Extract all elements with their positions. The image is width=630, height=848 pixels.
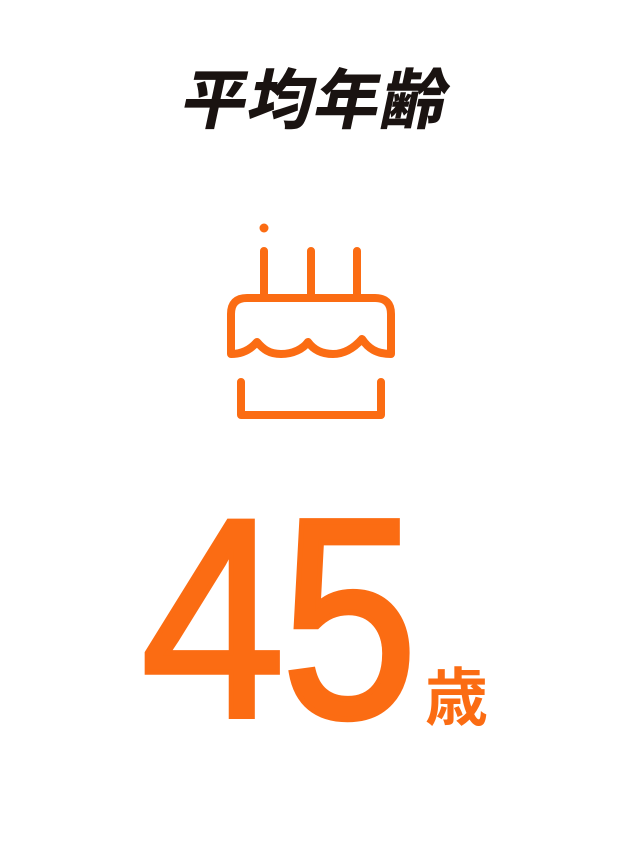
digit 4: 4 (141, 460, 285, 777)
big number (141, 460, 417, 778)
title: 平均年齢 (175, 48, 460, 142)
digit 5: 5 (282, 460, 417, 778)
unit: 歳 (425, 648, 488, 739)
icon: candle flame dot (260, 224, 268, 232)
icon: cake base (241, 382, 381, 415)
icon: birthday cake (231, 224, 391, 415)
icon: candles (264, 251, 357, 298)
icon: cake top with icing (231, 298, 391, 354)
